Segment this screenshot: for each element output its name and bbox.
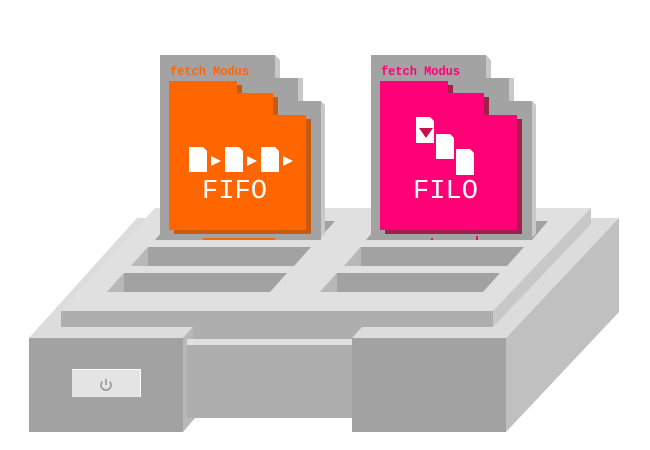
folder shape: pink [380, 81, 522, 234]
top plate [61, 208, 591, 327]
panel: FIFO folder [155, 55, 325, 240]
label: FILO: FILO [413, 177, 478, 207]
slot: left row 1 [131, 247, 311, 266]
slot: right row 2 [320, 273, 500, 292]
rear slots [300, 221, 548, 240]
clipped caption remnant [203, 238, 275, 240]
panel: FILO folder [366, 55, 536, 240]
heading: fetch Modus: fetch Modus [170, 64, 249, 79]
slot: left row 2 [107, 273, 287, 292]
icon: file stack with down arrow [416, 117, 474, 175]
heading: fetch Modus: fetch Modus [381, 64, 460, 79]
slot: right row 1 [344, 247, 524, 266]
clipped caption remnant [431, 236, 478, 240]
label: FIFO: FIFO [202, 177, 267, 207]
folder shape: orange [169, 81, 311, 234]
power button [72, 369, 141, 397]
icon: file queue with arrows [189, 147, 293, 172]
device base [29, 218, 619, 432]
